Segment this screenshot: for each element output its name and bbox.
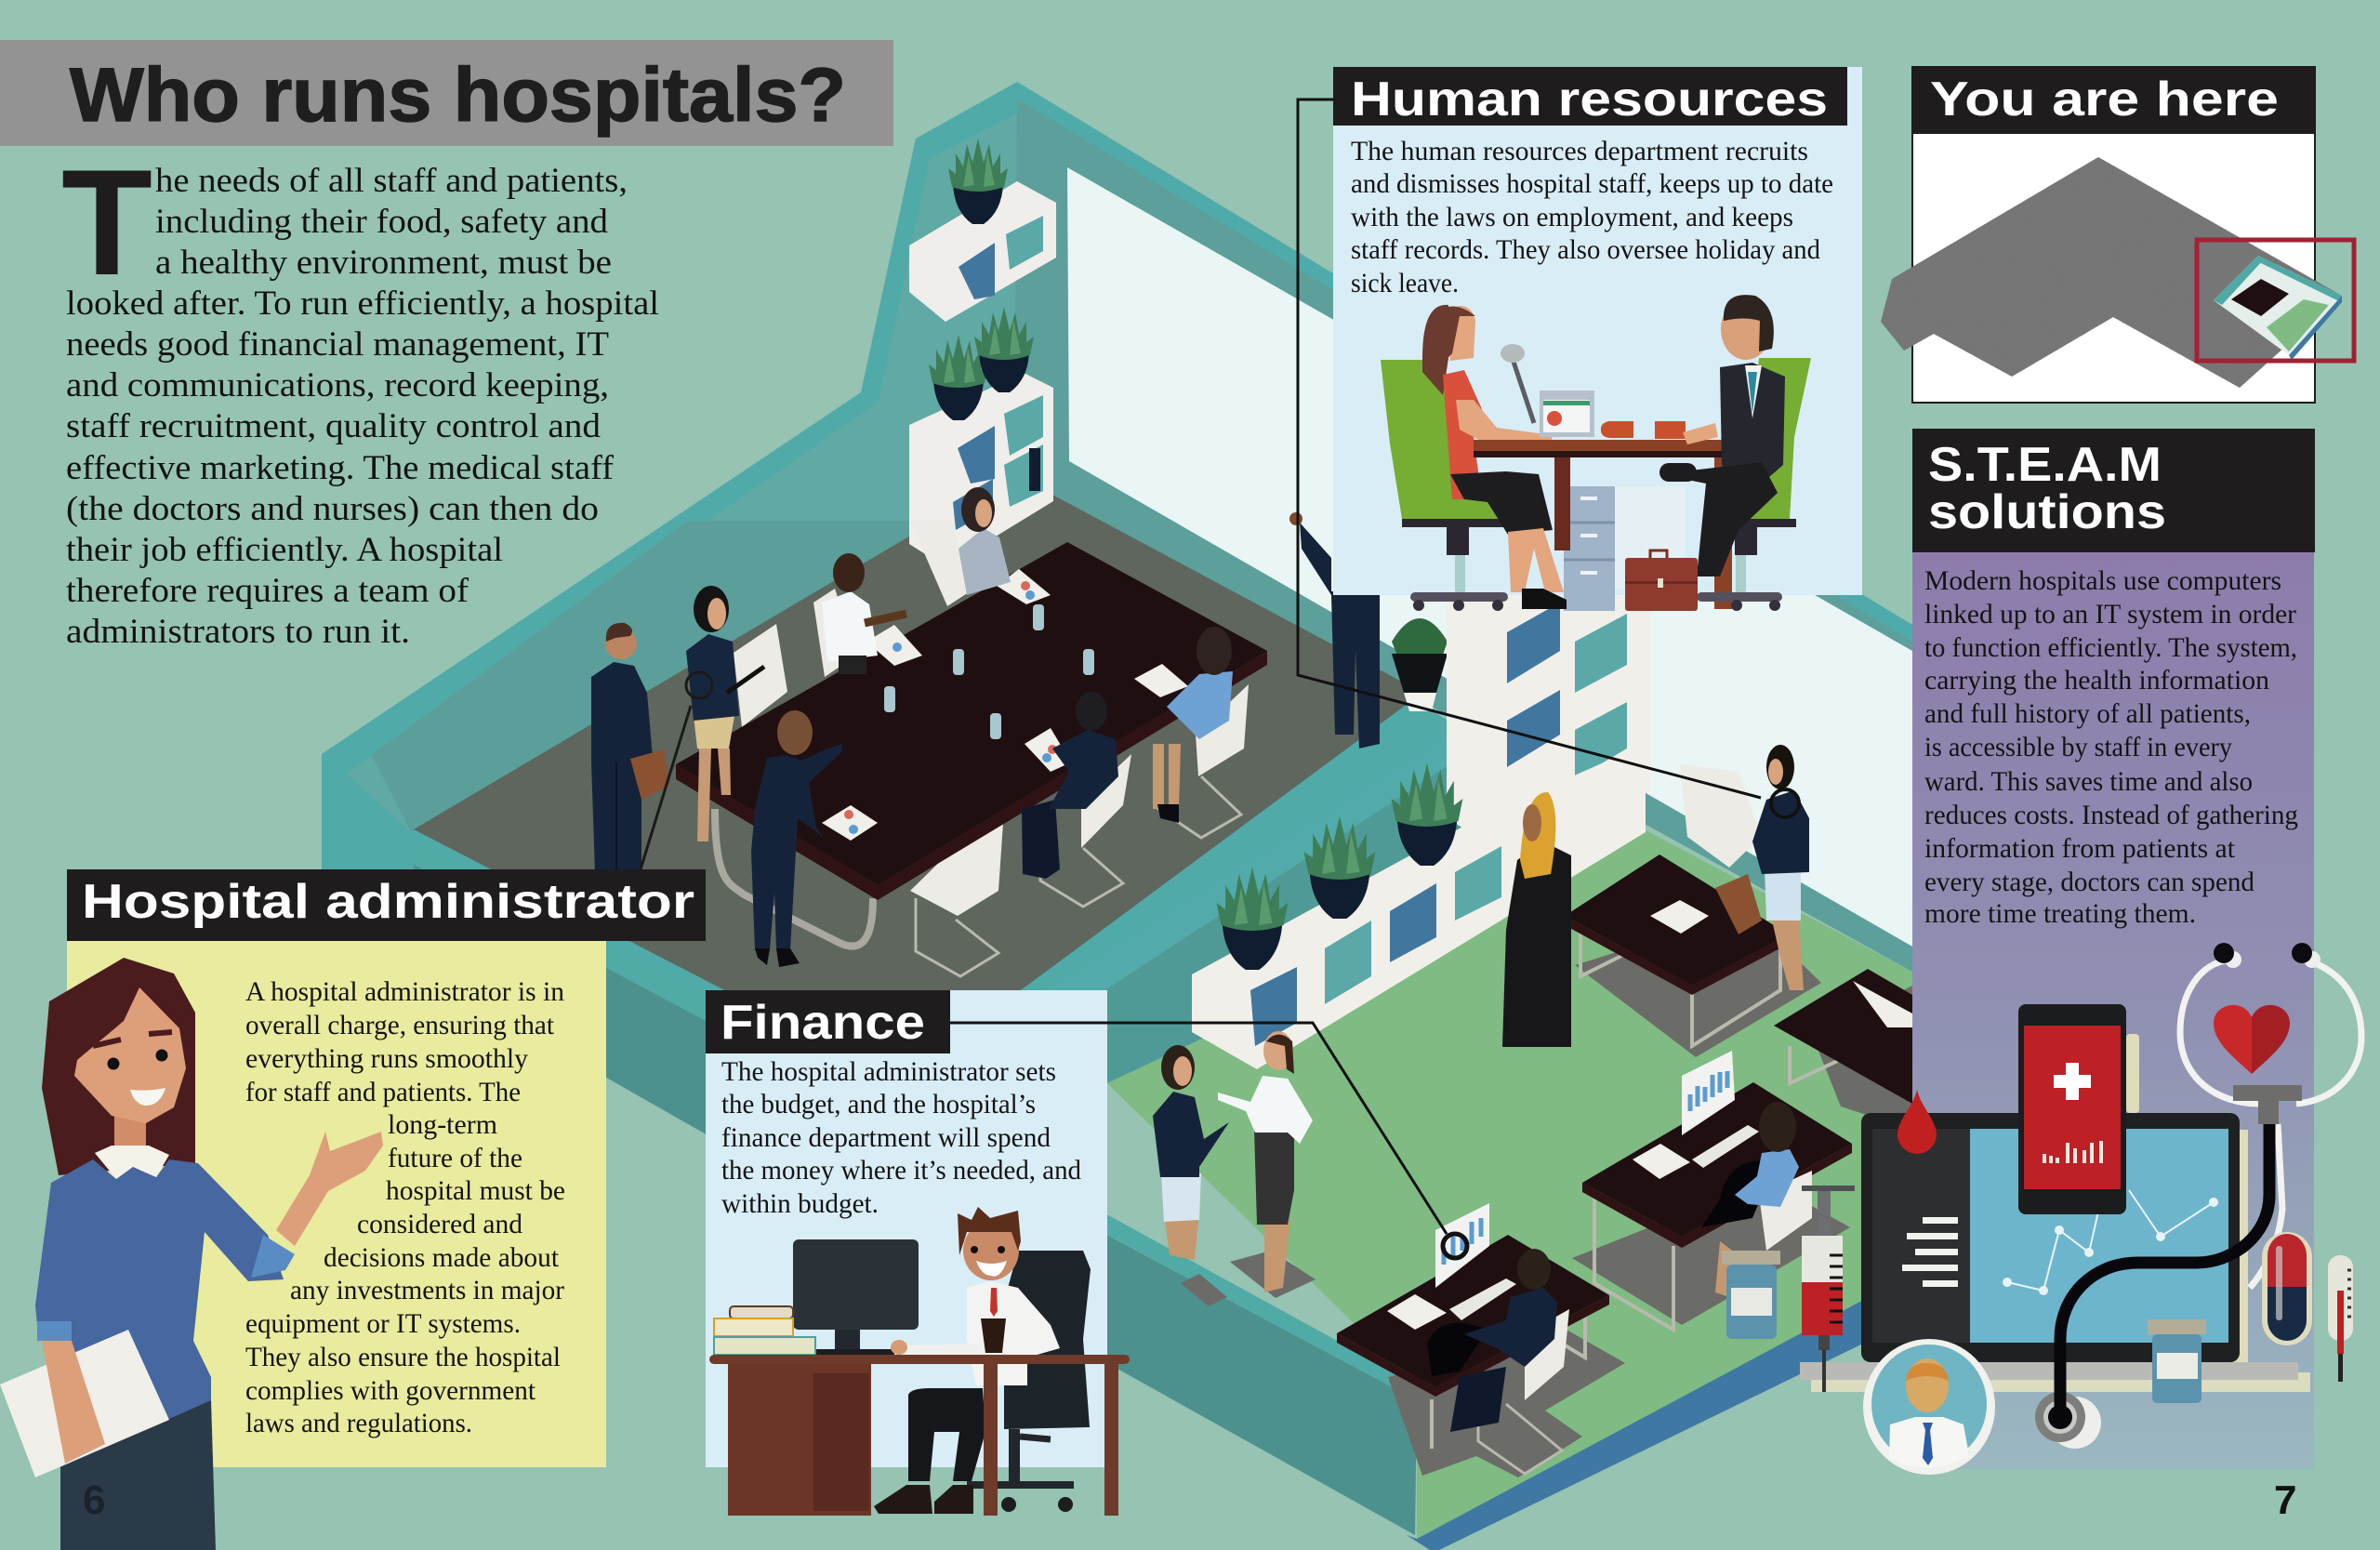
text block: introduction: including their food, safety and [155,203,609,241]
person: man interviewee [1659,295,1785,576]
text block: administrator: future of the [388,1143,522,1173]
text block: human resources [1351,136,1833,298]
desk D with monitor [1337,1203,1609,1474]
person: woman with tablet, standing [1153,1045,1229,1260]
text block: introduction: (the doctors and nurses) can then do [66,490,599,528]
monitor [793,1239,919,1355]
text block: human resources: The human resources department recruits [1351,136,1808,166]
icon: pill [2262,1232,2312,1345]
icon: thermometer [2328,1255,2353,1382]
chair: left [1381,360,1519,611]
person: standing man with briefcase [591,623,669,872]
icon: syringe [1802,1186,1855,1392]
text block: steam: reduces costs. Instead of gathering [1924,800,2298,830]
desk C with monitor [1582,1051,1852,1330]
worker [874,1207,1060,1514]
text block: steam: ward. This saves time and also [1924,766,2253,797]
text block: finance [721,1056,1081,1219]
panel: finance [706,990,1130,1516]
text block: administrator: complies with government [245,1375,536,1406]
books [714,1306,815,1355]
person: man at desk [1450,1249,1569,1432]
panel: S.T.E.A.M solutions [1912,429,2315,1469]
text block: administrator: overall charge, ensuring that [245,1010,555,1040]
text block: introduction: he needs of all staff and patients, [155,162,628,200]
illustration: isometric hospital offices [322,82,1912,1550]
heading: S.T.E.A.M: S.T.E.A.M [1928,438,2162,492]
illustration: interview at a desk [1381,295,1811,611]
text block: administrator: considered and [357,1209,522,1239]
arrow: finance connector [950,1023,1467,1258]
page number 6: 6 [83,1477,105,1523]
meeting room floor [414,474,1422,1080]
person: woman with tablet [686,586,764,841]
office chair [967,1251,1091,1512]
meeting table legs [715,809,873,947]
hair [42,958,195,1175]
text block: introduction: their job efficiently. A hospital [66,531,503,569]
heading: finance: Finance [721,996,925,1050]
text block: steam: is accessible by staff in every [1924,732,2232,762]
raised hand [276,1132,383,1246]
text block: administrator [245,976,565,1438]
person: seated woman in blue [1153,627,1233,823]
person: woman interviewer [1422,305,1567,609]
heading: solutions: solutions [1928,485,2166,539]
person: seated woman in grey [959,487,1011,595]
text block: administrator: everything runs smoothly [245,1043,528,1074]
front wall of the meeting room [414,833,1417,1535]
heading: hospital administrator: Hospital administrator [82,875,694,929]
page number 7: 7 [2274,1477,2296,1523]
person: standing woman leaning on table [751,710,842,967]
text block: finance: the budget, and the hospital’s [721,1089,1036,1119]
text block: steam: information from patients at [1924,833,2236,864]
illustration: hospital administrator woman [0,958,383,1550]
text block: administrator: hospital must be [386,1175,565,1206]
illustration: finance worker at desk [709,1207,1130,1516]
icon: doctor portrait [1863,1339,1995,1475]
long white shelf with doors [1192,744,1646,1069]
locator map [1881,157,2342,388]
icon: stethoscope [2035,943,2361,1449]
locator box [2197,240,2354,361]
sweater [35,1159,284,1467]
text block: administrator: long-term [388,1109,497,1140]
chair wire bases [916,752,1241,976]
text block: steam: every stage, doctors can spend [1924,867,2254,897]
filing cabinet [1564,486,1685,611]
highlighted office block [2214,256,2342,360]
text block: introduction: a healthy environment, must be [155,244,612,282]
arrow: administrator connector [641,672,712,869]
drop cap: T [61,139,152,307]
text block: introduction [61,139,659,651]
arrow: human resources connector [1298,99,1799,817]
lamp and laptop [1501,344,1594,437]
medical technology illustration [1800,429,2361,1475]
forearm [42,1341,105,1464]
dark pot plant behind panel [1392,618,1448,711]
text block: introduction: and communications, record keeping, [66,366,609,404]
wall shelf with plant, upper [909,139,1056,322]
text block: human resources: staff records. They also oversee holiday and [1351,234,1820,265]
chairs around meeting table [734,521,1249,916]
text block: introduction: looked after. To run efficiently, a hospital [66,285,659,323]
skirt [60,1400,216,1550]
text block: finance: the money where it’s needed, and [721,1155,1081,1186]
chair: right [1697,358,1811,611]
person: woman in hijab [1502,792,1571,1047]
icon: heart [2214,1005,2290,1074]
text block: steam: linked up to an IT system in order [1924,599,2296,629]
person: man behind panel [1289,512,1380,749]
desk [709,1355,1130,1516]
icon: laptop base [1800,1362,2310,1392]
collar [95,1146,169,1179]
text block: finance: finance department will spend [721,1122,1051,1153]
person: seated man in navy [1022,692,1118,879]
cuff [251,1235,295,1278]
text block: administrator: laws and regulations. [245,1408,472,1438]
panel: human resources [1333,67,1862,611]
person: woman in white shirt, standing [1218,1031,1313,1292]
person: woman in blue at desk [1715,1102,1812,1297]
text block: administrator: equipment or IT systems. [245,1308,521,1339]
text block: steam: and full history of all patients, [1924,698,2251,729]
office floor [1107,830,1912,1539]
briefcase [1625,550,1698,611]
text block: human resources: with the laws on employment, and keeps [1351,202,1793,232]
text block: steam: more time treating them. [1924,898,2196,929]
text block: administrator: any investments in major [290,1275,564,1305]
text block: administrator: for staff and patients. The [245,1077,521,1107]
icon: medicine jar [2148,1319,2206,1403]
icon: blood drop [1897,1090,1937,1154]
heading: human resources: Human resources [1351,73,1828,126]
text block: introduction: staff recruitment, quality control and [66,407,602,445]
text block: human resources: sick leave. [1351,268,1459,298]
text block: human resources: and dismisses hospital staff, keeps up to date [1351,168,1833,199]
mini jar in office [1722,1251,1780,1339]
person: seated woman in white shirt [822,553,906,674]
text block: administrator: They also ensure the hospital [245,1342,561,1372]
heading: you are here: You are here [1930,73,2279,126]
text block: administrator: A hospital administrator is in [245,976,564,1007]
text block: introduction: effective marketing. The medical staff [66,449,615,487]
text block: finance: within budget. [721,1188,879,1219]
title banner [0,40,893,146]
text block: steam [1924,565,2298,929]
meeting room walls [322,82,1912,1023]
paper folder [0,1330,169,1477]
panel: you are here [1881,67,2354,403]
text block: administrator: decisions made about [324,1242,560,1273]
wall shelf with plants, lower [909,307,1053,567]
text block: introduction: therefore requires a team of [66,572,469,610]
title: Who runs hospitals? [70,53,846,138]
meeting table [676,542,1267,900]
text block: steam: Modern hospitals use computers [1924,565,2281,596]
text block: steam: to function efficiently. The system, [1924,632,2297,663]
icon: laptop [1861,1113,2248,1362]
text block: introduction: administrators to run it. [66,613,410,651]
text block: finance: The hospital administrator sets [721,1056,1056,1087]
desk A with briefcase [1565,764,1789,1046]
text block: introduction: needs good financial management, IT [66,325,609,364]
blue floor edge [1407,1297,1869,1550]
papers and glasses on table [822,569,1188,841]
dividing wall [1023,735,1646,1083]
neck and face [74,987,186,1153]
left cuff [37,1321,72,1341]
text block: steam: carrying the health information [1924,665,2269,696]
panel: hospital administrator [67,869,706,1467]
tall white shelving [1447,595,1650,865]
floor mats [1181,911,1912,1477]
table and cups [1474,421,1736,609]
icon: phone [2018,1004,2139,1214]
desk B, behind panel [1774,969,1912,1104]
person: woman HR with jacket [1752,745,1809,990]
